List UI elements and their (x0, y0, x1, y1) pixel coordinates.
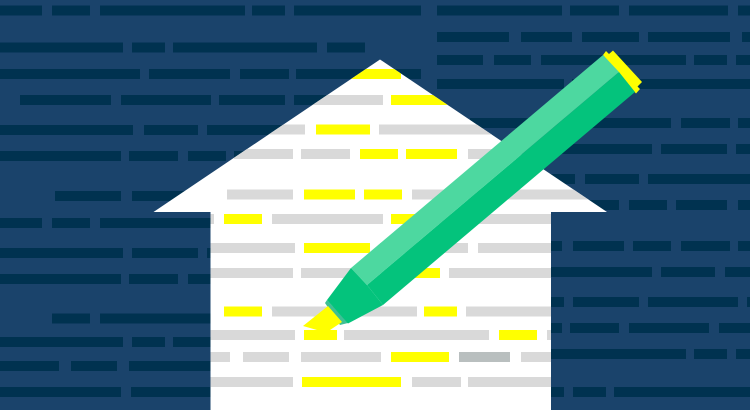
house-shaped white document (154, 60, 607, 410)
grey text lines (200, 95, 592, 387)
pen nose, dark green (327, 268, 383, 324)
nib collar (325, 300, 348, 325)
dark grey highlighted line (459, 352, 510, 362)
pen body, light green side (351, 55, 619, 285)
highlighter pen (303, 50, 642, 330)
yellow highlighted lines (224, 69, 537, 387)
pen tip, yellow (303, 306, 342, 330)
pen cap end, yellow (603, 50, 642, 94)
document lines inside house (200, 69, 592, 387)
pen body, dark green side (367, 72, 635, 305)
